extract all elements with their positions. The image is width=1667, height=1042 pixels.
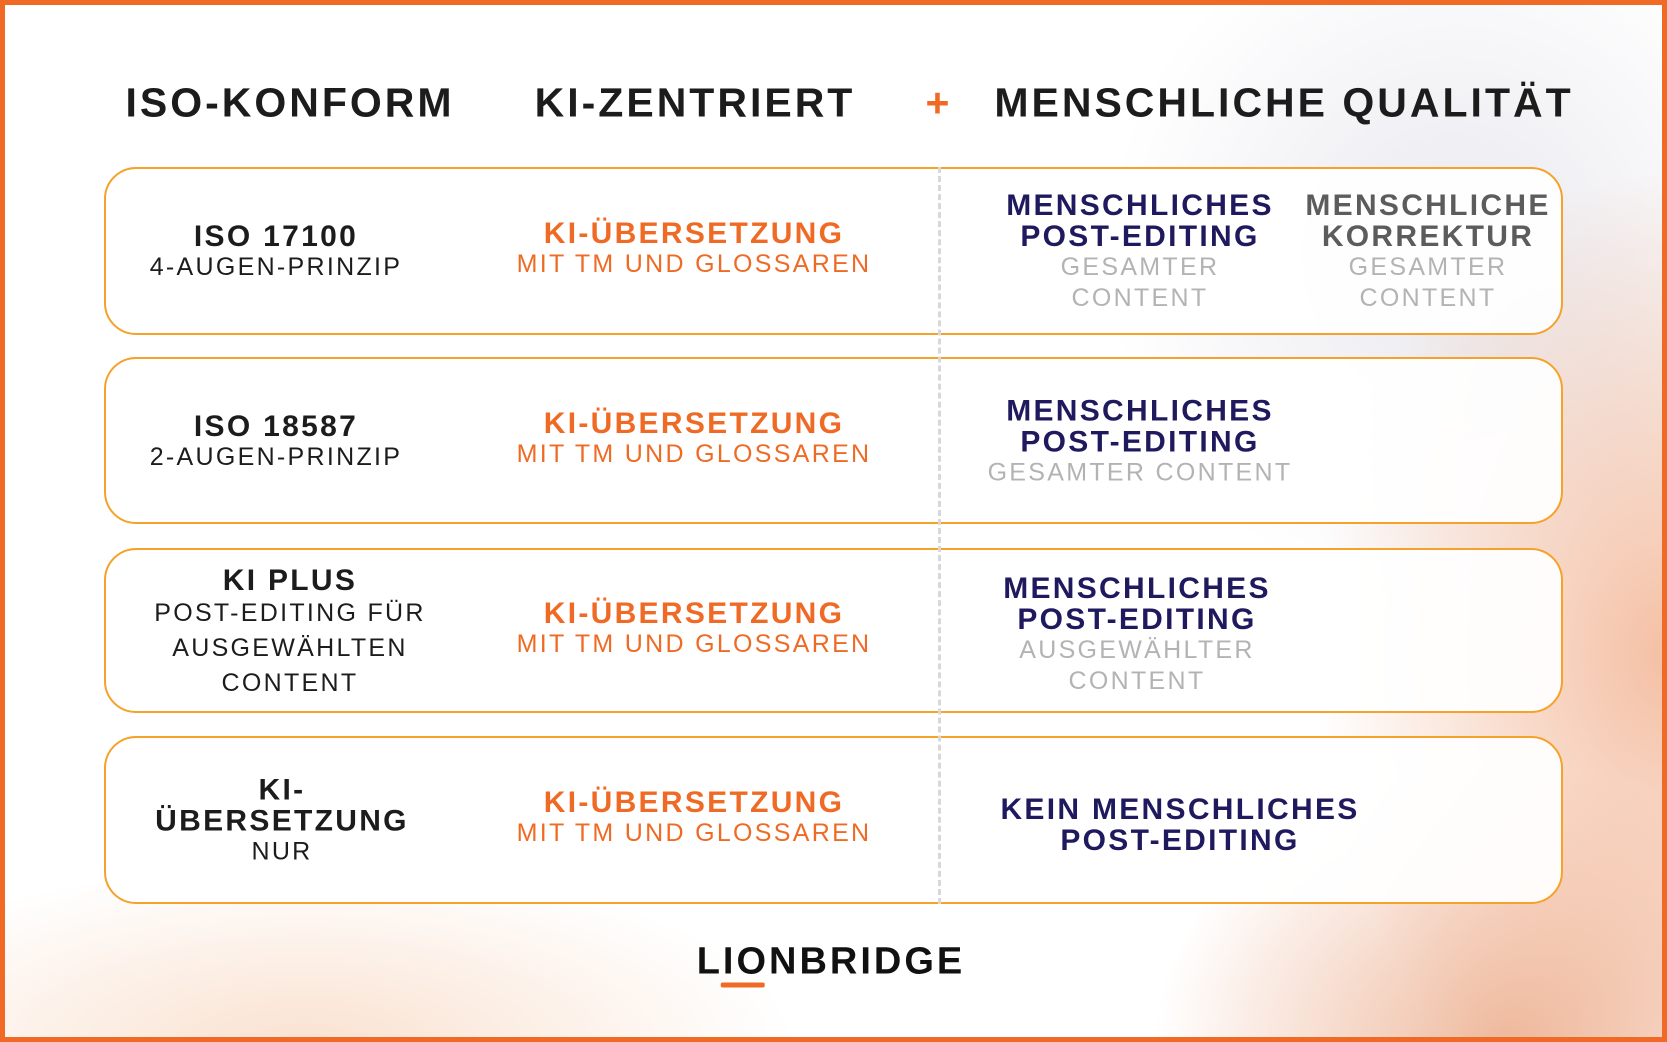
row4 col2 bbox=[517, 786, 871, 847]
row4 col1: KI- bbox=[259, 774, 305, 806]
row2 col2: MIT TM UND GLOSSAREN bbox=[517, 440, 871, 468]
row3 col1: POST-EDITING FÜR bbox=[154, 599, 426, 627]
row3 col2: KI-ÜBERSETZUNG bbox=[544, 597, 844, 630]
row2 col3 bbox=[988, 394, 1292, 486]
row1 col4: CONTENT bbox=[1360, 284, 1496, 312]
row1 col1: 4-AUGEN-PRINZIP bbox=[150, 253, 402, 281]
row4 col1 bbox=[155, 774, 409, 866]
row1 col4: MENSCHLICHE bbox=[1305, 189, 1551, 222]
row1 col2 bbox=[517, 217, 871, 278]
row1 col3: CONTENT bbox=[1072, 284, 1208, 312]
row3 col1: CONTENT bbox=[222, 669, 358, 697]
row1 col1 bbox=[150, 220, 402, 281]
panel: row 2 bbox=[104, 357, 1563, 524]
row1 col2: KI-ÜBERSETZUNG bbox=[544, 217, 844, 250]
row2 col1 bbox=[150, 410, 402, 471]
row4 col1: NUR bbox=[251, 838, 313, 866]
icon: plus: + bbox=[926, 80, 952, 126]
heading: MENSCHLICHE QUALITÄT: MENSCHLICHE QUALITÄT bbox=[994, 80, 1574, 126]
panel: row 4 bbox=[104, 736, 1563, 904]
row2 col1: 2-AUGEN-PRINZIP bbox=[150, 443, 402, 471]
row1 col3: POST-EDITING bbox=[1020, 220, 1260, 253]
row1 col4: KORREKTUR bbox=[1322, 220, 1534, 253]
row4 col3: KEIN MENSCHLICHES bbox=[1000, 793, 1360, 826]
row1 col3 bbox=[1006, 189, 1274, 312]
row1 col2: MIT TM UND GLOSSAREN bbox=[517, 250, 871, 278]
logo: LIONBRIDGE: LIONBRIDGE bbox=[697, 940, 965, 982]
row3 col3: CONTENT bbox=[1069, 667, 1205, 695]
row3 col1 bbox=[154, 564, 426, 697]
row3 col3 bbox=[1003, 572, 1271, 695]
row1 col3: MENSCHLICHES bbox=[1006, 189, 1274, 222]
heading: ISO-KONFORM: ISO-KONFORM bbox=[125, 80, 455, 126]
row2 col3: GESAMTER CONTENT bbox=[988, 458, 1292, 486]
row4 col3: POST-EDITING bbox=[1060, 824, 1300, 857]
row4 col2: KI-ÜBERSETZUNG bbox=[544, 786, 844, 819]
row3 col3: AUSGEWÄHLTER bbox=[1019, 636, 1255, 664]
row2 col3: POST-EDITING bbox=[1020, 426, 1260, 458]
row4 col3 bbox=[1000, 793, 1360, 857]
row1 col4 bbox=[1305, 189, 1551, 312]
row2 col2: KI-ÜBERSETZUNG bbox=[544, 407, 844, 440]
heading: KI-ZENTRIERT: KI-ZENTRIERT bbox=[535, 80, 855, 126]
row4 col2: MIT TM UND GLOSSAREN bbox=[517, 819, 871, 847]
row3 col3: POST-EDITING bbox=[1017, 603, 1257, 636]
row3 col2 bbox=[517, 597, 871, 658]
row2 col1: ISO 18587 bbox=[194, 410, 358, 443]
dashed divider bbox=[938, 167, 941, 904]
row1 col3: GESAMTER bbox=[1061, 253, 1219, 281]
row1 col1: ISO 17100 bbox=[194, 220, 358, 253]
panel: row 1 bbox=[104, 167, 1563, 335]
row3 col1: KI PLUS bbox=[223, 564, 357, 597]
row2 col2 bbox=[517, 407, 871, 468]
panel: row 3 bbox=[104, 548, 1563, 713]
row1 col4: GESAMTER bbox=[1349, 253, 1507, 281]
row2 col3: MENSCHLICHES bbox=[1006, 394, 1274, 428]
row4 col1: ÜBERSETZUNG bbox=[155, 804, 409, 838]
row3 col1: AUSGEWÄHLTEN bbox=[172, 634, 408, 662]
row3 col3: MENSCHLICHES bbox=[1003, 572, 1271, 605]
row3 col2: MIT TM UND GLOSSAREN bbox=[517, 630, 871, 658]
